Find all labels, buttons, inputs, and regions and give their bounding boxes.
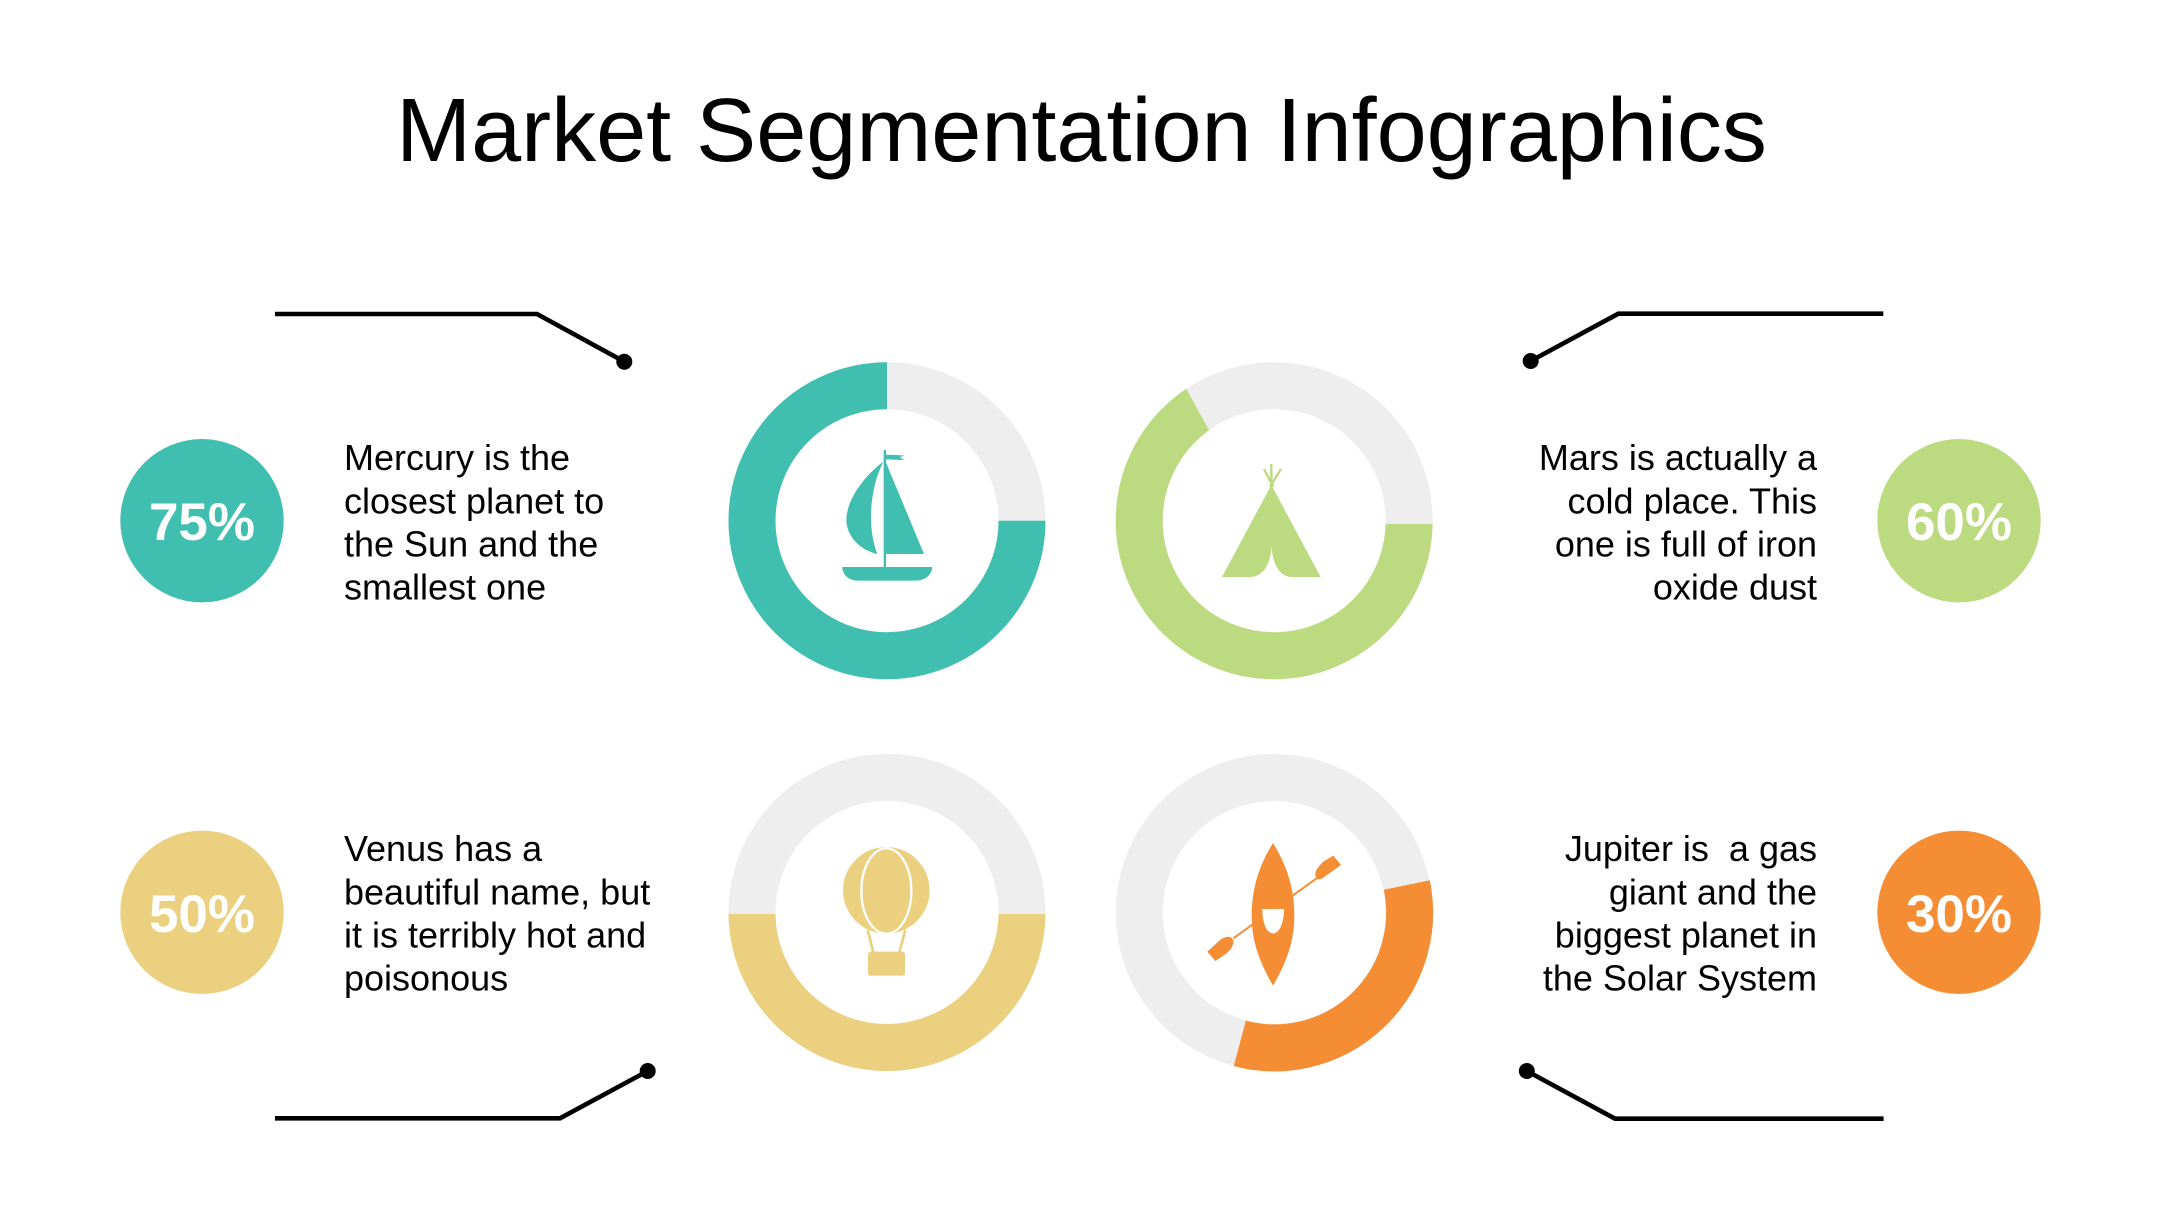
text: Jupiter description: the Solar System bbox=[1543, 958, 1817, 998]
text: Jupiter description: biggest planet in bbox=[1555, 914, 1817, 956]
text: Venus description: poisonous bbox=[344, 958, 508, 998]
text: Mars description: oxide dust bbox=[1653, 566, 1817, 608]
donut chart: 60% bbox=[1139, 386, 1409, 656]
text: Mercury description: smallest one bbox=[344, 566, 546, 608]
icon: kayak with paddle bbox=[1207, 843, 1341, 986]
icon: teepee tent bbox=[1222, 464, 1321, 577]
panel: Venus 50% bbox=[120, 778, 1022, 1118]
text: Venus description: beautiful name, but bbox=[344, 872, 650, 912]
text: Mars description: cold place. This bbox=[1568, 480, 1817, 522]
badge: 60%: 60% bbox=[1906, 493, 2012, 552]
badge: 50% bbox=[120, 831, 284, 994]
badge: 75%: 75% bbox=[149, 493, 255, 552]
icon: hot air balloon bbox=[843, 847, 930, 976]
badge: 75% bbox=[120, 439, 284, 602]
text: Mercury description: Mercury is the bbox=[344, 437, 570, 478]
text: Venus description: Venus has a bbox=[344, 828, 543, 869]
text: Jupiter description: giant and the bbox=[1609, 872, 1817, 912]
connector: Mercury bbox=[275, 314, 632, 370]
text: Jupiter description: Jupiter is a gas bbox=[1565, 828, 1817, 869]
donut chart: 50% bbox=[752, 778, 1022, 1048]
connector: Mars bbox=[1523, 314, 1883, 369]
text: Mercury description: closest planet to bbox=[344, 480, 604, 522]
text: Venus description: it is terribly hot and bbox=[344, 914, 646, 956]
text: Mercury description: the Sun and the bbox=[344, 524, 598, 564]
text: Mars description: Mars is actually a bbox=[1539, 437, 1818, 478]
badge: 50%: 50% bbox=[149, 885, 255, 944]
badge: 60% bbox=[1877, 439, 2041, 602]
badge: 30% bbox=[1877, 831, 2041, 994]
connector: Venus bbox=[275, 1063, 656, 1118]
donut chart: 30% bbox=[1139, 778, 1410, 1048]
badge: 30%: 30% bbox=[1906, 885, 2012, 944]
text: Mars description: one is full of iron bbox=[1555, 524, 1817, 564]
title: Market Segmentation Infographics bbox=[396, 81, 1767, 181]
connector: Jupiter bbox=[1519, 1063, 1884, 1119]
donut chart: 75% bbox=[752, 386, 1022, 656]
panel: Mars 60% bbox=[1139, 314, 2041, 656]
panel: Mercury 75% bbox=[120, 314, 1022, 656]
panel: Jupiter 30% bbox=[1139, 778, 2041, 1119]
icon: sailboat bbox=[842, 450, 932, 581]
